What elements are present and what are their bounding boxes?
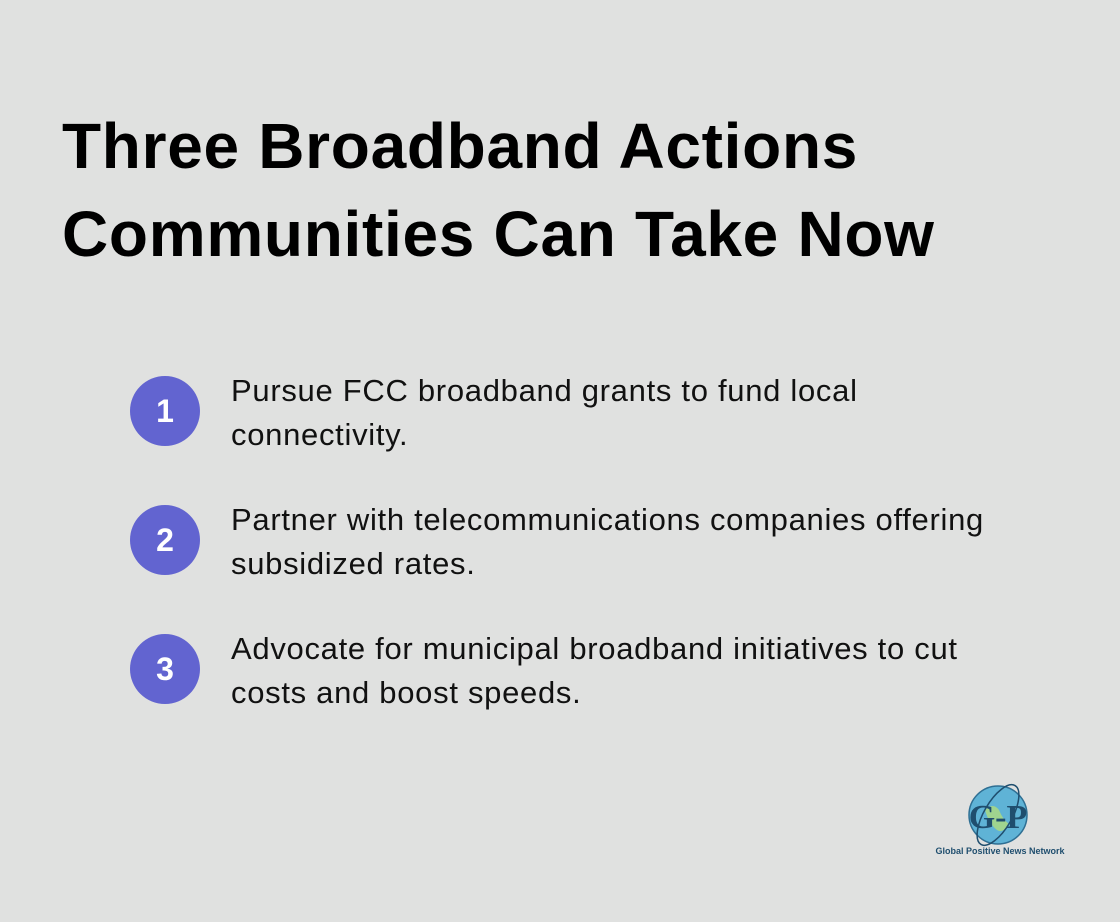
title: Communities Can Take Now	[62, 198, 935, 270]
title	[62, 110, 935, 270]
logo text: Global Positive News Network	[935, 846, 1065, 856]
text 2: Partner with telecommunications companies offering	[231, 502, 984, 537]
item 1	[130, 373, 858, 452]
text 3: costs and boost speeds.	[231, 675, 581, 710]
circle 1	[130, 376, 200, 446]
item 3	[130, 631, 958, 710]
text 3	[231, 631, 958, 710]
text 1	[231, 373, 858, 452]
text 2: subsidized rates.	[231, 546, 476, 581]
text 1: Pursue FCC broadband grants to fund local	[231, 373, 858, 408]
circle 3	[130, 634, 200, 704]
text 1: connectivity.	[231, 417, 408, 452]
circle 1: 1	[156, 393, 174, 429]
circle 3: 3	[156, 651, 174, 687]
title: Three Broadband Actions	[62, 110, 858, 182]
item 2	[130, 502, 984, 581]
text 3: Advocate for municipal broadband initiatives to cut	[231, 631, 958, 666]
logo	[935, 784, 1065, 856]
circle 2	[130, 505, 200, 575]
icon: globe: G-P	[969, 799, 1027, 836]
circle 2: 2	[156, 522, 174, 558]
text 2	[231, 502, 984, 581]
